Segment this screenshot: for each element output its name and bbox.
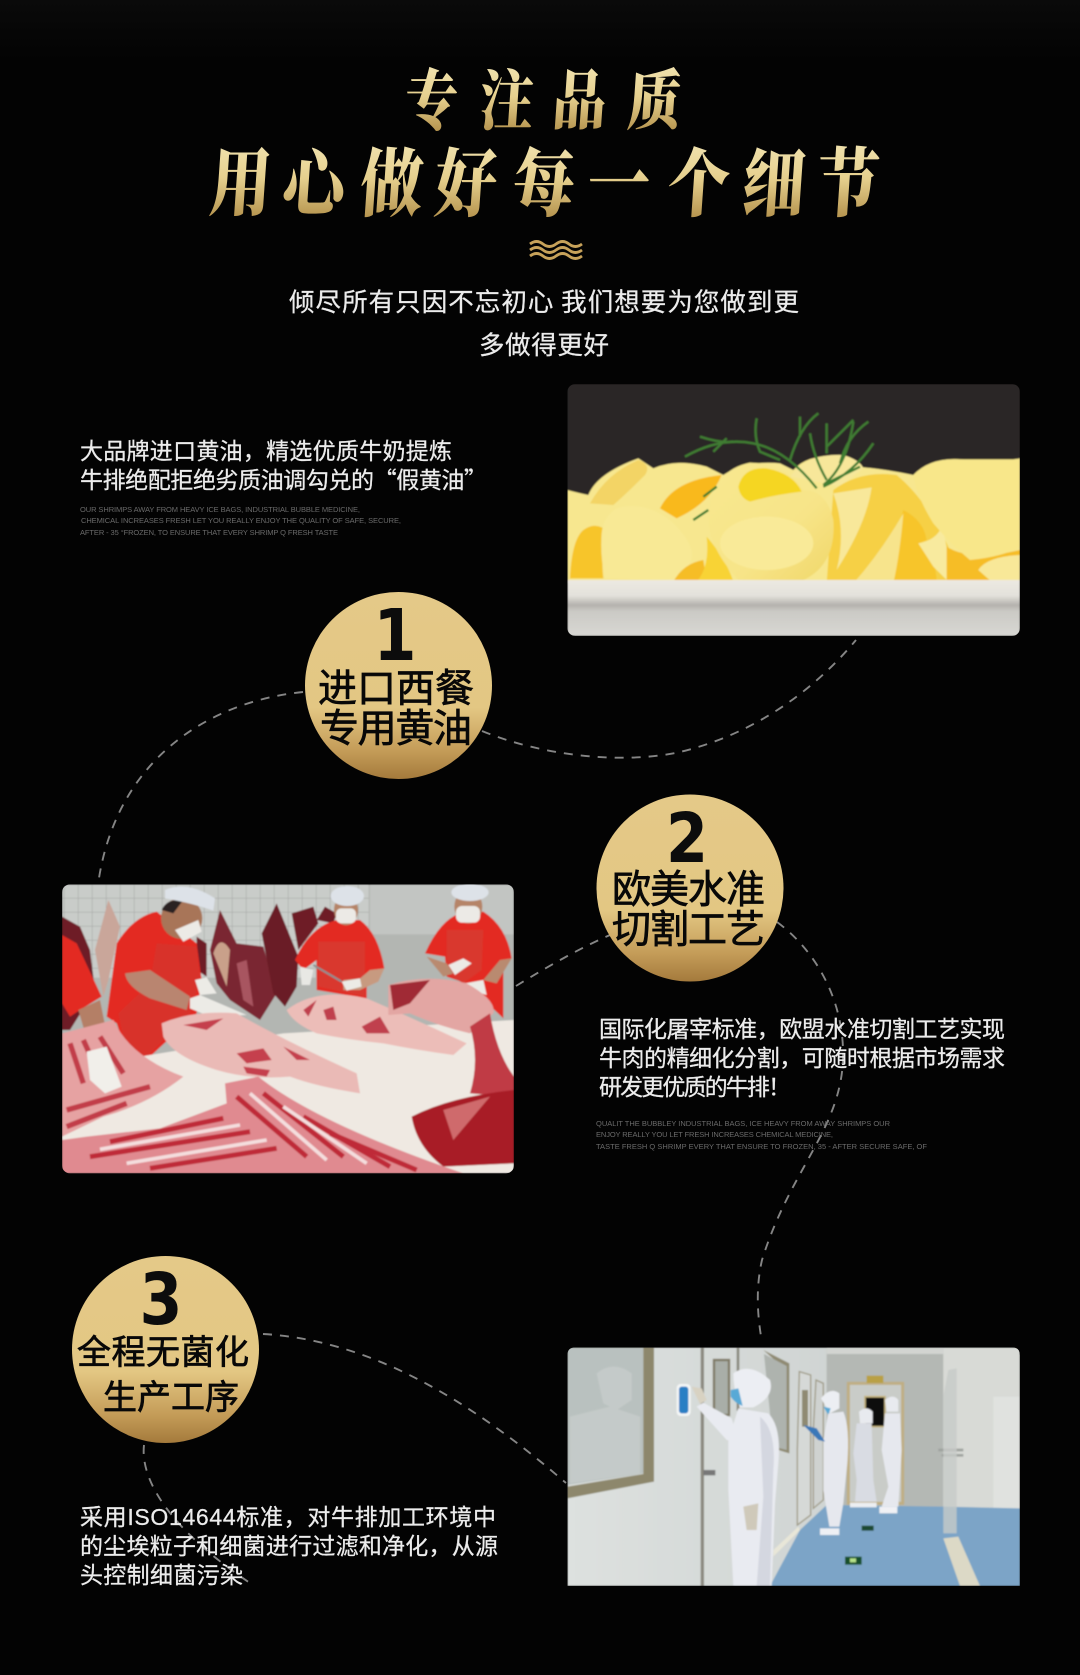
text block: cutting description: ENJOY REALLY YOU LET FRESH INCREASES CHEMICAL MEDICINE, — [596, 1130, 833, 1139]
middle figure — [821, 1391, 839, 1413]
doors and small windows — [701, 1347, 704, 1586]
text block: cutting description: QUALIT THE BUBBLEY INDUSTRIAL BAGS, ICE HEAVY FROM AWAY SHRIMPS OUR — [596, 1119, 891, 1128]
text block: cutting description: TASTE FRESH Q SHRIMP EVERY THAT ENSURE TO FROZEN, 35 - AFTER SECURE SAFE, OF — [596, 1142, 927, 1151]
text block: cutting description: 研发更优质的牛排！ — [599, 1068, 791, 1102]
worker 2 — [295, 886, 384, 998]
icon: gold wave ornament — [530, 242, 582, 258]
text block: cutting description — [596, 1010, 1005, 1151]
text block: butter description: AFTER - 35 °FROZEN, TO ENSURE THAT EVERY SHRIMP Q FRESH TASTE — [80, 528, 338, 537]
table — [62, 1020, 514, 1173]
dashed connector: circle 3 to text — [144, 1445, 253, 1585]
text block: butter description — [80, 432, 487, 537]
worker 1 — [107, 886, 247, 1057]
panel: meat cutting photo — [62, 884, 514, 1173]
subtitle — [289, 282, 799, 362]
title: 用心做好每一个细节 — [206, 124, 883, 232]
text block: sterile process description: 头控制细菌污染 — [80, 1556, 243, 1590]
text block: butter description: OUR SHRIMPS AWAY FROM HEAVY ICE BAGS, INDUSTRIAL BUBBLE MEDICINE, — [80, 505, 360, 514]
title — [206, 50, 883, 232]
badge 1: 进口西餐 — [318, 658, 474, 714]
badge 2: 切割工艺 — [612, 899, 765, 955]
panel: butter photo — [567, 384, 1020, 636]
text block: butter description: 大品牌进口黄油，精选优质牛奶提炼 — [80, 432, 452, 466]
subtitle: 倾尽所有只因不忘初心 我们想要为您做到更 — [289, 282, 799, 319]
badge 2: 欧美水准 — [612, 859, 765, 915]
text block: sterile process description: 的尘埃粒子和细菌进行过滤和净化，从源 — [80, 1527, 498, 1561]
badge 3: 生产工序 — [103, 1370, 239, 1419]
text block: butter description: 牛排绝配拒绝劣质油调勾兑的“假黄油” — [80, 461, 487, 495]
badge 3: 全程无菌化 — [77, 1325, 249, 1374]
dashed connector: circle 2 to cleanroom photo — [758, 922, 843, 1342]
panel: cleanroom photo — [567, 1347, 1020, 1586]
badge 1: 专用黄油 — [320, 698, 472, 754]
badge 1: 1 — [374, 594, 416, 677]
dashed connector: meat photo to circle 2 — [516, 935, 610, 986]
dashed connector: circle 1 to meat photo — [99, 692, 303, 878]
text block: sterile process description: 采用ISO14644标准，对牛排加工环境中 — [80, 1504, 496, 1530]
title: 专注品质 — [402, 50, 686, 144]
back door — [848, 1383, 903, 1503]
dashed connector: circle 3 to cleanroom photo — [263, 1334, 566, 1483]
subtitle: 多做得更好 — [479, 325, 609, 362]
badge 2 — [596, 794, 784, 982]
dashed connector: circle 1 to butter photo — [482, 640, 856, 758]
window — [567, 1347, 643, 1485]
blue sign — [677, 1384, 691, 1416]
badge 3: 3 — [140, 1258, 182, 1341]
text block: butter description: CHEMICAL INCREASES FRESH LET YOU REALLY ENJOY THE QUALITY OF SAFE, SECURE, — [81, 516, 401, 525]
meat pieces — [162, 1013, 360, 1093]
text block: sterile process description — [80, 1504, 498, 1590]
text block: cutting description: 国际化屠宰标准，欧盟水准切割工艺实现 — [599, 1010, 1005, 1044]
text block: cutting description: 牛肉的精细化分割，可随时根据市场需求 — [599, 1039, 1005, 1073]
worker 3 — [425, 884, 512, 1018]
worker left — [62, 935, 102, 1017]
floor signs — [862, 1526, 874, 1531]
right glass fittings — [938, 1450, 963, 1455]
back figures — [859, 1408, 873, 1423]
big figure — [733, 1369, 771, 1407]
badge 2: 2 — [666, 799, 708, 879]
badge 3 — [72, 1256, 259, 1443]
badge 1 — [305, 592, 492, 779]
